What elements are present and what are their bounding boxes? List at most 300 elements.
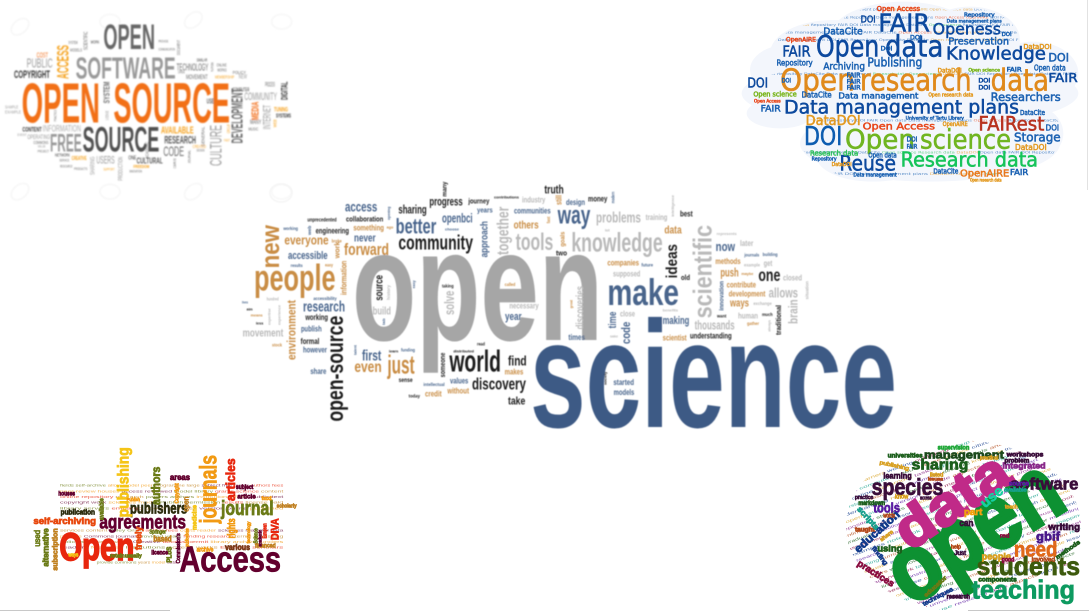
word cloud: open data teaching: good	[1002, 558, 1015, 564]
vertical words: development, culture, internet, media, digital: GENERAL	[200, 126, 205, 147]
word cloud: open research data (cloud shape): Open research data	[970, 178, 1002, 183]
tiny background words: provide Commons journal provided years funding research terms publishing	[60, 534, 283, 538]
word cloud: open data teaching: practice	[855, 495, 873, 501]
word cloud: open source: WORKS	[217, 68, 227, 73]
left part of central cloud: working	[305, 313, 328, 322]
right part of central cloud: scientist	[663, 333, 687, 343]
word: make: make	[607, 271, 679, 313]
tiny background words: research learners working publishing group classes study modules	[826, 411, 1047, 495]
right part of central cloud: benefits	[663, 308, 679, 313]
right part of central cloud: exchange	[753, 301, 772, 306]
left part of central cloud: talent	[354, 344, 358, 355]
word: FAIR: FAIR	[878, 9, 930, 38]
word cloud: open data teaching: finding	[870, 546, 888, 567]
vertical words: development, culture, internet, media, digital: PRODUCTION	[119, 157, 125, 181]
left part of central cloud: years	[477, 206, 493, 215]
right part of central cloud: fast	[546, 216, 551, 223]
right part of central cloud: goals	[560, 231, 566, 247]
word cloud: open source: COMMUNITY	[244, 91, 277, 103]
left part of central cloud: stock	[272, 343, 283, 348]
right part of central cloud: training	[646, 212, 667, 222]
word cloud: open access: archive	[197, 548, 214, 554]
tiny background words: understanding real results code aspects biology learner tools	[835, 436, 1056, 520]
right part of central cloud: ideas	[664, 244, 681, 278]
tiny background words: skills online classroom tasks topic materials analysis program	[831, 423, 1053, 508]
word cloud: open source: POLICY	[233, 70, 246, 75]
word cloud: open data teaching: components	[978, 578, 1017, 584]
word cloud: open access: scholarly	[277, 504, 297, 510]
word cloud: open source: EXAMPLE	[5, 109, 21, 114]
left part of central cloud: accessibility	[313, 296, 337, 301]
word cloud: open source: CONTENT	[22, 126, 42, 133]
word cloud: open source: INNOVATION	[129, 168, 142, 173]
right part of central cloud: building	[763, 252, 778, 258]
word cloud: open access: subscription	[50, 528, 59, 571]
word cloud: open data teaching: people	[982, 551, 1011, 561]
word cloud: open source: TUNING	[274, 107, 288, 114]
word cloud: open access: article	[237, 493, 256, 500]
left part of central cloud: means	[251, 313, 263, 318]
left part of central cloud: called	[505, 282, 516, 287]
tiny background words: library servers embargo books archives version online published	[60, 506, 283, 510]
word cloud: open research data (cloud shape): Open Access	[877, 5, 921, 13]
left part of central cloud: communities	[514, 207, 551, 216]
tiny background words: Research data Data management DOI FAIR Repository Open data DataCite Open research data DataDOI DOI FAIR Repository Open data	[740, 38, 1083, 42]
word: open-source: open-source	[322, 316, 348, 422]
word: Data management plans: Data management plans	[784, 97, 1019, 118]
left part of central cloud: learn	[389, 349, 399, 354]
right part of central cloud: started	[613, 377, 634, 387]
word cloud: open data teaching: education	[852, 509, 903, 556]
tiny background words: engage network tasks sessions online analyses instructor modelling	[861, 505, 1082, 589]
right part of central cloud: gather	[747, 321, 759, 326]
word cloud: open data teaching: taught	[855, 528, 875, 534]
word cloud: open source: NETWORK	[55, 153, 70, 158]
right part of central cloud: best	[680, 210, 693, 219]
word cloud: open source: PROVIDE	[158, 39, 169, 44]
word cloud: open research data (cloud shape): DataCite	[802, 91, 832, 100]
word cloud: open data teaching: listed	[930, 473, 943, 479]
left part of central cloud: easy	[325, 262, 333, 267]
right part of central cloud: understanding	[690, 330, 732, 340]
right part of central cloud: development	[729, 289, 765, 299]
tiny background words: policies society paper Creative access permit library archive funders	[60, 540, 284, 544]
word cloud: open research data (cloud shape): DOI	[747, 76, 768, 91]
right part of central cloud: great	[568, 299, 573, 308]
left part of central cloud: history	[386, 285, 391, 300]
tiny background words: readers fee open institutions access works Elsevier scholars	[60, 546, 284, 550]
left part of central cloud: accessible	[288, 250, 328, 262]
left part of central cloud: however	[303, 346, 327, 355]
word cloud: open source: SOURCE	[113, 72, 230, 136]
word cloud: open source: CODE	[163, 143, 184, 159]
left part of central cloud: many	[442, 181, 449, 197]
word cloud: open access: self-archiving	[33, 516, 96, 526]
vertical words: development, culture, internet, media, digital: SHARING	[89, 157, 96, 175]
right part of central cloud: making	[663, 315, 689, 327]
vertical words: development, culture, internet, media, digital: DIGITAL	[279, 82, 289, 100]
word cloud: open data teaching: practical	[980, 455, 998, 461]
word: Open research data	[780, 64, 1049, 99]
left part of central cloud: engineering	[316, 225, 349, 235]
right part of central cloud: ways	[729, 298, 749, 310]
word cloud: open data teaching: can	[959, 518, 974, 528]
word cloud: open access: publications	[184, 528, 189, 547]
word cloud: open access: Springer	[149, 529, 166, 535]
right part of central cloud: always	[767, 319, 772, 332]
vertical words: development, culture, internet, media, digital: GROUP	[226, 124, 231, 133]
vertical words: development, culture, internet, media, digital: CULTURE	[207, 125, 226, 166]
right part of central cloud: methods	[715, 257, 741, 266]
left part of central cloud: truth	[544, 182, 564, 196]
word cloud: open source: MUSIC	[248, 127, 259, 132]
word cloud: open research data (cloud shape): FAIR	[761, 105, 781, 115]
word cloud: open access: Science	[253, 528, 259, 543]
tiny background words: online repository research papers authors institutional fees public text	[60, 495, 283, 499]
word cloud: open research data (cloud shape): DOI	[1048, 51, 1069, 65]
right part of central cloud: models	[614, 387, 634, 397]
word cloud: open research data (cloud shape): FAIR	[1010, 168, 1029, 177]
vertical words: development, culture, internet, media, digital: PLATFORM	[209, 62, 214, 72]
left part of central cloud: contributions	[494, 195, 520, 200]
right part of central cloud	[546, 192, 809, 397]
faint watermark	[270, 184, 292, 202]
word cloud: open data teaching: supervision	[938, 445, 970, 451]
word: Reuse: Reuse	[839, 152, 896, 177]
word cloud: open data teaching: markdown	[858, 501, 885, 507]
word cloud: open source: PROJECT	[38, 149, 49, 154]
word: science: science	[530, 290, 897, 460]
word: people: people	[254, 258, 336, 299]
word cloud: open data teaching: publishing	[879, 460, 910, 472]
left part of central cloud: build	[373, 306, 391, 318]
left part of central cloud: choose	[445, 227, 460, 232]
word cloud: open source: ONE	[128, 155, 137, 161]
right part of central cloud: get	[764, 259, 773, 268]
left part of central cloud: collaboration	[346, 215, 384, 224]
word cloud: open source: COMMUNICATION	[158, 47, 175, 52]
word cloud: open source: FAST	[224, 138, 230, 143]
tiny background words: research computing course analysis sets metadata discover repository	[851, 480, 1072, 564]
left part of central cloud: opening	[386, 206, 391, 220]
word cloud: open research data (cloud shape): Open research data	[928, 93, 973, 99]
word cloud: open data teaching: research	[947, 594, 970, 600]
left part of central cloud: first	[362, 349, 381, 365]
left part of central cloud: access	[345, 199, 377, 215]
word cloud: open research data (cloud shape): Archiving	[823, 61, 865, 72]
word cloud: open access: used	[33, 530, 42, 547]
tiny background words: teachers workflow portal mobilization standards value reuse openly	[858, 499, 1079, 583]
tiny background words	[846, 440, 1081, 610]
left part of central cloud: publish	[301, 323, 322, 333]
word cloud: open research data (cloud shape): Open Access	[754, 99, 781, 105]
word cloud: open access: publishers	[130, 500, 187, 517]
vertical words: development, culture, internet, media, digital: MEDIA	[250, 102, 261, 120]
word cloud: open source: PUBLIC	[27, 56, 53, 71]
word cloud: open research data (cloud shape): DOI	[1002, 32, 1012, 38]
left part of central cloud: necessary	[509, 302, 539, 311]
right part of central cloud: brain	[785, 299, 800, 324]
word cloud: open data teaching: involved	[1032, 557, 1055, 564]
word cloud: open research data (cloud shape)	[740, 2, 1084, 183]
word cloud: open data teaching: methods	[1055, 539, 1082, 561]
left part of central cloud: movement	[243, 328, 283, 340]
left part of central cloud: progress	[429, 195, 463, 209]
word cloud: open research data (cloud shape): DOI	[804, 121, 842, 151]
word cloud: open research data (cloud shape): FAIR	[847, 71, 861, 79]
word: new: new	[255, 224, 285, 268]
vertical words: development, culture, internet, media, digital: PRACTICE	[53, 109, 58, 122]
left part of central cloud: intellectual	[423, 382, 445, 388]
word cloud: open research data (cloud shape): DOI	[907, 136, 917, 144]
left part of central cloud: web	[307, 226, 312, 236]
right part of central cloud: journals	[744, 253, 760, 259]
word cloud: open source: ACCESS	[53, 45, 72, 79]
word cloud: open research data (cloud shape): FAIR	[1007, 67, 1022, 74]
right part of central cloud: society	[603, 371, 608, 385]
left part of central cloud: just	[387, 349, 415, 379]
word cloud: open research data (cloud shape): DOI	[978, 78, 991, 85]
word cloud: open data teaching: software	[1010, 474, 1078, 493]
word cloud: open access: subject	[236, 485, 253, 491]
left part of central cloud: solve	[441, 291, 457, 315]
word cloud: open source: EVENT	[17, 132, 27, 137]
left part of central cloud: hundred	[267, 297, 279, 302]
word cloud: open data teaching: Just	[954, 551, 966, 557]
vertical words: development, culture, internet, media, digital: DOCUMENT	[176, 40, 181, 55]
word: publishing: publishing	[115, 447, 132, 517]
word cloud: open source: COMPUTER	[233, 88, 249, 94]
right part of central cloud: represents	[717, 231, 737, 236]
tiny background words: graduate institutions importance papers journals carpentry experience web	[845, 461, 1067, 546]
word cloud: open data teaching: red	[1000, 534, 1009, 540]
word: tools: tools	[516, 229, 553, 256]
right part of central cloud: situation	[804, 281, 809, 299]
word: Open data: Open	[816, 30, 879, 64]
word: Research data: Research data	[901, 148, 1038, 172]
word cloud: open source: AVAILABLE	[161, 125, 194, 136]
word cloud: open research data (cloud shape): DOI	[861, 15, 876, 26]
word cloud: open source: PROCESS	[265, 83, 275, 89]
word: Open science: Open	[845, 124, 915, 155]
right part of central cloud: thousands	[695, 318, 735, 332]
tiny background words	[60, 484, 285, 564]
word cloud: open research data (cloud shape): FAIR	[847, 78, 861, 85]
word cloud: open source: VALUE	[38, 144, 46, 149]
word cloud: open research data (cloud shape): Researchers	[991, 90, 1061, 104]
right part of central cloud: problems	[596, 211, 641, 227]
word cloud: open source: WORK	[91, 39, 100, 44]
word cloud: open source: ONLINE	[217, 63, 227, 68]
right part of central cloud: money	[588, 194, 608, 203]
word cloud: open data teaching: writing	[1047, 522, 1080, 532]
word cloud: open research data (cloud shape): Data management	[853, 173, 897, 179]
word: Open research data: research	[860, 64, 972, 99]
vertical words: development, culture, internet, media, digital: ACADEMIC	[144, 141, 149, 158]
word: species: species	[872, 474, 943, 500]
left part of central cloud: aim	[247, 308, 253, 312]
word: Open science: science	[920, 124, 1011, 155]
word cloud: open access: academic	[258, 529, 263, 547]
word cloud: open access: alternative	[41, 528, 50, 567]
vertical words: development, culture, internet, media, digital: SYSTEM	[102, 81, 111, 103]
word cloud: open source: COMMONS	[33, 140, 48, 145]
word cloud: open access: text	[262, 496, 272, 502]
right part of central cloud: traditional	[774, 305, 783, 335]
word cloud: open access: available	[98, 498, 105, 520]
left part of central cloud: share	[310, 366, 326, 376]
word: discovery: discovery	[472, 374, 527, 393]
right part of central cloud: one	[758, 265, 780, 285]
tiny background words: masters computer module reuse science citizen course masters	[829, 417, 1050, 502]
word cloud: open data teaching: available	[1004, 488, 1027, 494]
word cloud: open data teaching: management	[924, 449, 1004, 461]
tiny background words: Research data Open science DOI FAIR DataCite Repository Data management plans Open Access OpenAIRE DOI FAIR Repository DataCite Open data	[740, 15, 1083, 19]
word cloud: open research data (cloud shape): DOI	[1046, 124, 1059, 133]
word cloud: open research data (cloud shape): Open science	[753, 91, 797, 99]
word cloud: open access: financed	[255, 542, 276, 549]
left part of central cloud: credit	[425, 390, 442, 399]
word cloud: open access: various	[225, 543, 250, 552]
left part of central cloud: less	[256, 321, 264, 326]
left part of central cloud: broke	[332, 238, 342, 243]
vertical words: development, culture, internet, media, digital: INTERNET	[262, 105, 274, 129]
tiny background words: peer-review houses access reviewed model library grants science content	[60, 489, 283, 493]
word cloud: open research data (cloud shape): DataDOI	[832, 162, 852, 168]
vertical words: development, culture, internet, media, digital: LICENSE	[104, 111, 109, 120]
word cloud: open data teaching: educator	[923, 575, 949, 599]
word: students: students	[977, 551, 1080, 581]
word cloud: open source: USERS	[96, 154, 115, 166]
word: way: way	[557, 199, 591, 229]
word cloud: open research data (cloud shape): Repository	[812, 157, 837, 163]
word cloud: open data teaching: scripts	[855, 505, 881, 532]
right part of central cloud: example	[744, 263, 760, 268]
word cloud: open research data (cloud shape): Open Access	[863, 121, 935, 132]
word cloud: open data teaching	[846, 440, 1081, 610]
word cloud: open source: OPEN	[178, 69, 185, 74]
word cloud: open research data (cloud shape): Preservation	[948, 36, 1009, 47]
word cloud: open source: MOVEMENT	[186, 74, 208, 81]
word cloud: open research data (cloud shape): Open data	[868, 151, 897, 159]
tiny background words: understand basic applied community designed knowledge training example	[833, 429, 1055, 514]
word cloud: open source: INFORMATION	[43, 124, 81, 134]
left part of central cloud: forward	[344, 240, 389, 259]
word cloud: open source: SERVICE	[59, 158, 70, 163]
word cloud: open data teaching: universities	[888, 452, 923, 459]
word cloud: open source: SYSTEM	[68, 40, 78, 45]
tiny background words: online exercise lessons assignment project biodiversity programming r	[842, 454, 1064, 539]
word cloud: open access: rights	[226, 518, 238, 538]
word cloud: open access: retain	[110, 554, 125, 560]
word cloud: open access: technology	[246, 521, 251, 543]
word: teaching: teaching	[972, 574, 1075, 604]
word cloud: open research data (cloud shape): University of Tartu Library	[906, 115, 964, 121]
left part of central cloud: journey	[468, 196, 490, 205]
tiny background words: examples notebook class syllabus tutorial lectures reuse field	[849, 474, 1070, 558]
vertical words: development, culture, internet, media, digital: SCIENTIFIC	[83, 32, 89, 50]
right part of central cloud: close	[620, 309, 635, 319]
word cloud: open research data (cloud shape): DOI	[978, 84, 991, 91]
left part of central cloud: even	[354, 359, 382, 376]
cloud background	[742, 2, 1078, 182]
word cloud: open data teaching: help	[951, 544, 961, 550]
word cloud: open research data (cloud shape): Storage	[1014, 131, 1061, 145]
word cloud: open research data (cloud shape): DataCite	[933, 167, 958, 175]
word cloud: open science (central)	[242, 181, 897, 460]
word cloud: open access: Commission's	[176, 533, 182, 563]
word cloud: open research data (cloud shape): Data management	[838, 91, 918, 100]
word: OPEN: OPEN	[103, 18, 155, 57]
word cloud: open data teaching: share	[879, 529, 895, 543]
left part of central cloud: source	[373, 275, 385, 301]
right part of central cloud: now	[716, 239, 735, 254]
right part of central cloud: old	[681, 273, 690, 282]
right part of central cloud: much	[762, 312, 773, 317]
left part of central cloud: experience	[277, 304, 282, 325]
tiny background words: learning curriculum scientists community cite licence publish occurrence	[854, 486, 1076, 571]
tiny background words: DOI Data management plans FAIR Repository DataCite Open science Research data DataDOI Open data FAIR DOI Repository DataCite	[740, 150, 1084, 154]
word cloud: open data teaching: know	[895, 494, 909, 500]
left part of central cloud: never	[354, 233, 376, 245]
left part of central cloud: take	[508, 396, 525, 408]
left part of central cloud: work	[333, 241, 342, 259]
right part of central cloud: human	[738, 310, 758, 320]
word cloud: open source: FREE	[50, 131, 82, 158]
word: journals: journals	[196, 455, 223, 524]
tiny background words: properly support version topics method fair reproducible workflow	[838, 442, 1059, 527]
right part of central cloud: future	[641, 263, 653, 268]
tiny background words: DataDOI Open research data Repository FAIR DOI Data management DataCite Open science Repository DOI FAIR Open data Data management	[740, 23, 1084, 27]
word: better: better	[396, 214, 436, 238]
word cloud: open source: SUPPORT	[103, 167, 115, 172]
right part of central cloud: contribute	[727, 280, 756, 290]
word cloud: open access: medicine	[192, 505, 199, 530]
right part of central cloud: want	[716, 313, 727, 318]
word cloud: open research data (cloud shape): DataDOI	[806, 114, 861, 129]
tiny background words	[771, 8, 1076, 176]
word cloud: open source: COPYRIGHT	[14, 69, 50, 81]
tiny background words: repository students workflow citation license statistics share years	[840, 449, 1061, 533]
left part of central cloud: values	[450, 376, 469, 385]
word cloud: open research data (cloud shape): DOI	[782, 78, 791, 85]
word cloud: open data teaching: use	[977, 482, 1006, 511]
tiny background words: Repository Open data DataCite FAIR DOI Data management plans DataDOI OpenAIRE Open science Repository FAIR DOI	[740, 172, 1083, 176]
word cloud: open research data (cloud shape): Data management plans	[947, 19, 1002, 25]
left part of central cloud: information	[339, 261, 348, 295]
right part of central cloud: design	[566, 198, 585, 207]
word cloud: open source	[5, 8, 292, 203]
word: journal: journal	[220, 498, 274, 520]
left part of central cloud: find	[508, 352, 527, 368]
right part of central cloud: push	[720, 266, 739, 280]
word cloud: open research data (cloud shape): DataDOI	[1023, 42, 1052, 51]
word cloud: open data teaching: workshops	[1006, 452, 1044, 459]
left part of central cloud: lives	[242, 299, 249, 304]
left part of central cloud: unprecedented	[307, 218, 337, 224]
word cloud: open data teaching: sharing	[912, 457, 968, 473]
left part of central cloud: expertise	[267, 308, 272, 325]
word cloud: open data teaching: tools	[873, 500, 900, 516]
left part of central cloud: today	[409, 393, 421, 398]
right part of central cloud: lot	[605, 228, 610, 233]
word: agreements: agreements	[99, 512, 186, 533]
left part of central cloud: someone	[438, 353, 447, 377]
word cloud: open research data (cloud shape): Open science	[968, 68, 1000, 74]
tiny background words: discipline demonstrate datasets fields groups theory concepts mapping	[863, 511, 1084, 596]
word cloud: open source: MODELS	[70, 48, 82, 53]
left part of central cloud: sense	[399, 377, 413, 384]
